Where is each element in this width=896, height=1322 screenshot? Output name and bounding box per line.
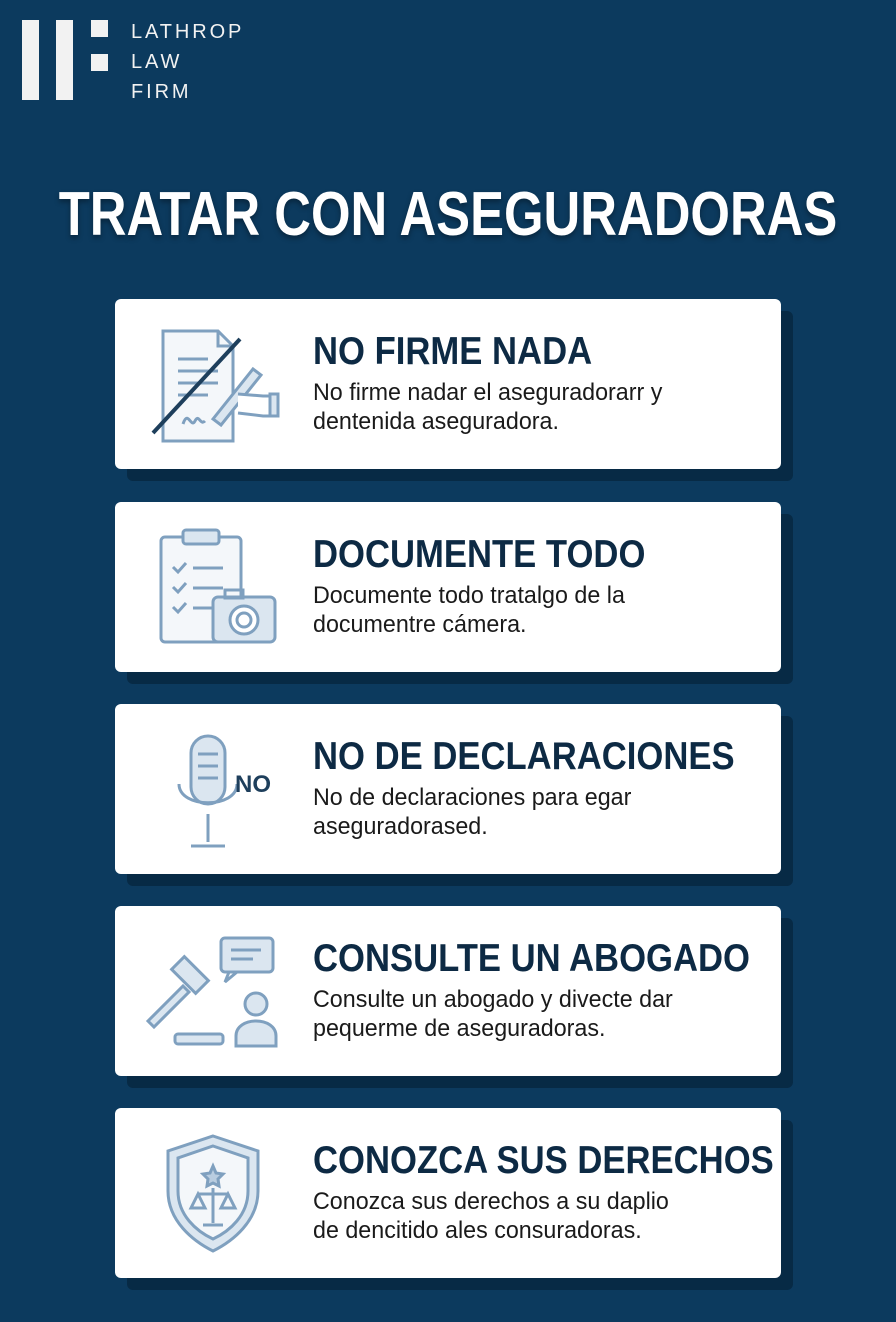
card 4 — [115, 906, 781, 1076]
body text: dentenida aseguradora. — [313, 408, 559, 435]
card 5 — [115, 1108, 781, 1278]
icon: microphone NO — [178, 734, 271, 848]
logo: LATHROP — [131, 21, 244, 43]
logo — [22, 20, 244, 103]
icon: microphone NO: NO — [235, 771, 271, 798]
body text: Documente todo tratalgo de la — [313, 582, 625, 609]
body text — [313, 784, 631, 840]
body text — [313, 1188, 669, 1244]
heading: CONOZCA SUS DERECHOS — [313, 1139, 774, 1182]
card 2 — [115, 502, 781, 672]
card 1 — [115, 299, 781, 469]
heading: CONSULTE UN ABOGADO — [313, 937, 750, 980]
body text: de dencitido ales consuradoras. — [313, 1217, 642, 1244]
icon: clipboard and camera — [160, 528, 276, 644]
logo: FIRM — [131, 81, 191, 103]
icon: document with pen crossed — [152, 330, 280, 442]
heading: DOCUMENTE TODO — [313, 533, 645, 576]
heading: NO FIRME NADA — [313, 330, 592, 373]
body text — [313, 379, 662, 435]
body text: pequerme de aseguradoras. — [313, 1015, 606, 1042]
body text: No de declaraciones para egar — [313, 784, 631, 811]
icon: shield with scales — [166, 1134, 260, 1253]
card 3 — [115, 704, 781, 874]
body text: No firme nadar el aseguradorarr y — [313, 379, 662, 406]
icon: gavel and lawyer — [146, 936, 278, 1048]
title: TRATAR CON ASEGURADORAS — [59, 180, 837, 249]
body text: Conozca sus derechos a su daplio — [313, 1188, 669, 1215]
body text: Consulte un abogado y divecte dar — [313, 986, 673, 1013]
heading: NO DE DECLARACIONES — [313, 735, 735, 778]
body text: aseguradorased. — [313, 813, 488, 840]
body text — [313, 582, 625, 638]
logo: LAW — [131, 51, 182, 73]
body text: documentre cámera. — [313, 611, 527, 638]
body text — [313, 986, 673, 1042]
